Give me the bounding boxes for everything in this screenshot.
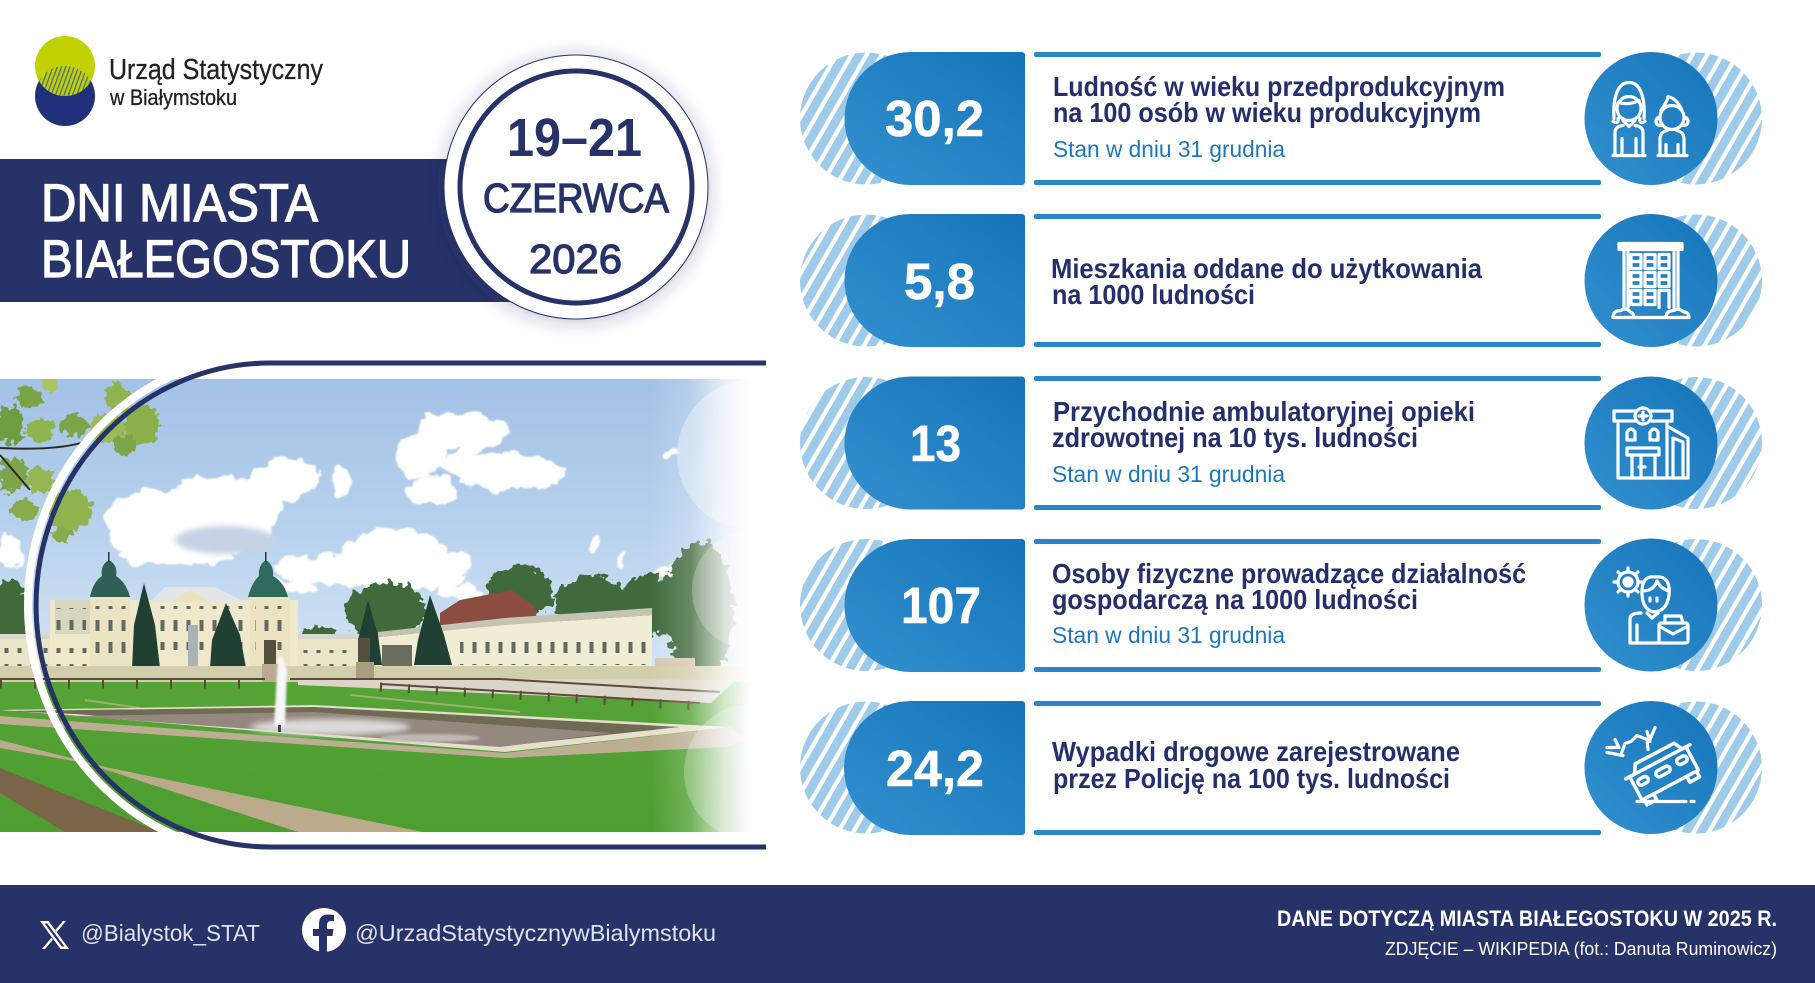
- tree foliage: [0, 374, 159, 543]
- date badge: 2026: [529, 236, 622, 282]
- icon: woman and child: [1613, 82, 1688, 156]
- date badge: 19–21: [507, 108, 642, 168]
- footer bar: [0, 885, 1815, 983]
- description: Stan w dniu 31 grudnia: [1053, 136, 1285, 162]
- description: [1051, 253, 1482, 310]
- logo: Urząd Statystyczny w Białymstoku: [35, 36, 323, 126]
- icon: clinic building: [1614, 408, 1688, 478]
- source note: ZDJĘCIE – WIKIPEDIA (fot.: Danuta Ruminowicz): [1385, 939, 1777, 959]
- photo frame arcs and lines: [28, 355, 766, 855]
- value badge: [844, 701, 1025, 835]
- row 5: [800, 701, 1762, 835]
- gravel paths and beam: [0, 740, 423, 832]
- title banner: [0, 159, 530, 302]
- row 4: [800, 538, 1762, 672]
- description: Ludność w wieku przedprodukcyjnym: [1053, 71, 1505, 102]
- description: [1052, 396, 1475, 487]
- date badge: CZERWCA: [483, 175, 670, 221]
- logo: Urząd Statystyczny w Białymstoku: w Białymstoku: [109, 85, 237, 110]
- row 4: 107: [901, 577, 981, 634]
- row 1: [800, 52, 1762, 185]
- date badge: [444, 55, 708, 319]
- description: Wypadki drogowe zarejestrowane: [1052, 736, 1460, 767]
- row 2: 5,8: [904, 253, 975, 310]
- row 5: 24,2: [886, 740, 984, 797]
- description: na 100 osób w wieku produkcyjnym: [1053, 97, 1481, 128]
- description: Stan w dniu 31 grudnia: [1052, 461, 1285, 487]
- row 3: [800, 376, 1762, 510]
- description: [1052, 736, 1460, 794]
- description: zdrowotnej na 10 tys. ludności: [1052, 422, 1418, 453]
- footer bar: @UrzadStatystycznywBialymstoku: [355, 920, 716, 946]
- background trees: [0, 542, 734, 678]
- row 3: 13: [910, 415, 961, 472]
- description: gospodarczą na 1000 ludności: [1052, 584, 1418, 615]
- palace right wing: [378, 590, 695, 668]
- value badge: [844, 214, 1025, 347]
- icon: entrepreneur with gear and briefcase: [1614, 568, 1688, 643]
- photo: Branicki Palace with fountain: [0, 379, 746, 832]
- row 1: 30,2: [885, 90, 984, 147]
- value badge: [844, 376, 1025, 510]
- fountain pool: [0, 655, 745, 758]
- footer bar: @Bialystok_STAT: [81, 920, 260, 946]
- value badge: [844, 52, 1025, 185]
- right fade to white: [658, 379, 760, 832]
- description: Przychodnie ambulatoryjnej opieki: [1053, 396, 1475, 427]
- statues: [264, 638, 370, 664]
- icon: car crash: [1607, 728, 1705, 808]
- description: Mieszkania oddane do użytkowania: [1051, 253, 1482, 284]
- palace main building: [0, 552, 380, 668]
- title banner: BIAŁEGOSTOKU: [41, 230, 411, 289]
- value badge: [844, 539, 1025, 672]
- logo: Urząd Statystyczny w Białymstoku: Urząd Statystyczny: [109, 54, 323, 86]
- source note: [1277, 906, 1777, 959]
- cypress trees: [132, 583, 452, 668]
- description: [1052, 558, 1526, 648]
- description: Stan w dniu 31 grudnia: [1052, 622, 1285, 648]
- icon: Facebook: [302, 908, 346, 952]
- description: Osoby fizyczne prowadzące działalność: [1052, 558, 1526, 589]
- title banner: DNI MIASTA: [41, 174, 319, 233]
- plinth and lawn: [0, 662, 760, 832]
- description: [1053, 71, 1505, 162]
- icon: X: [40, 921, 69, 949]
- row 2: [800, 214, 1762, 347]
- icon: apartment block: [1613, 244, 1689, 318]
- description: na 1000 ludności: [1052, 279, 1255, 310]
- description: przez Policję na 100 tys. ludności: [1053, 763, 1450, 794]
